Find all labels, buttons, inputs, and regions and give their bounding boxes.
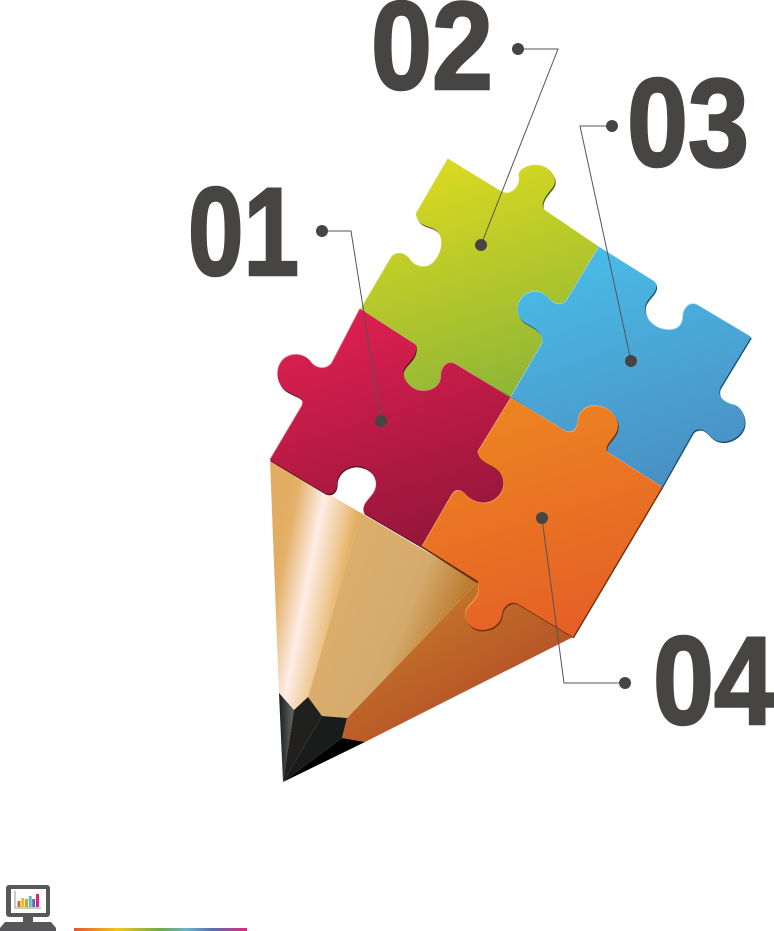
- pencil: [270, 460, 573, 782]
- icon: computer monitor with bar chart: [0, 885, 56, 931]
- puzzle piece: orange: [422, 397, 663, 638]
- connector 02: [475, 43, 558, 251]
- number 03: 03: [627, 54, 749, 193]
- number 01: 01: [188, 163, 299, 302]
- pencil lead: [279, 693, 365, 782]
- connector 03: [580, 120, 637, 367]
- puzzle piece: red: [270, 308, 512, 548]
- pencil wood edge over orange piece: [422, 547, 478, 582]
- puzzle piece: blue: [511, 246, 752, 488]
- rainbow divider bar: [74, 928, 247, 931]
- pencil wood: left facet: [270, 460, 361, 710]
- connector 04: [536, 512, 631, 689]
- pencil wood: lower right facet: [342, 582, 573, 742]
- puzzle piece: green: [361, 158, 600, 398]
- connector 01: [316, 225, 387, 427]
- pencil wood: middle facet: [308, 513, 478, 718]
